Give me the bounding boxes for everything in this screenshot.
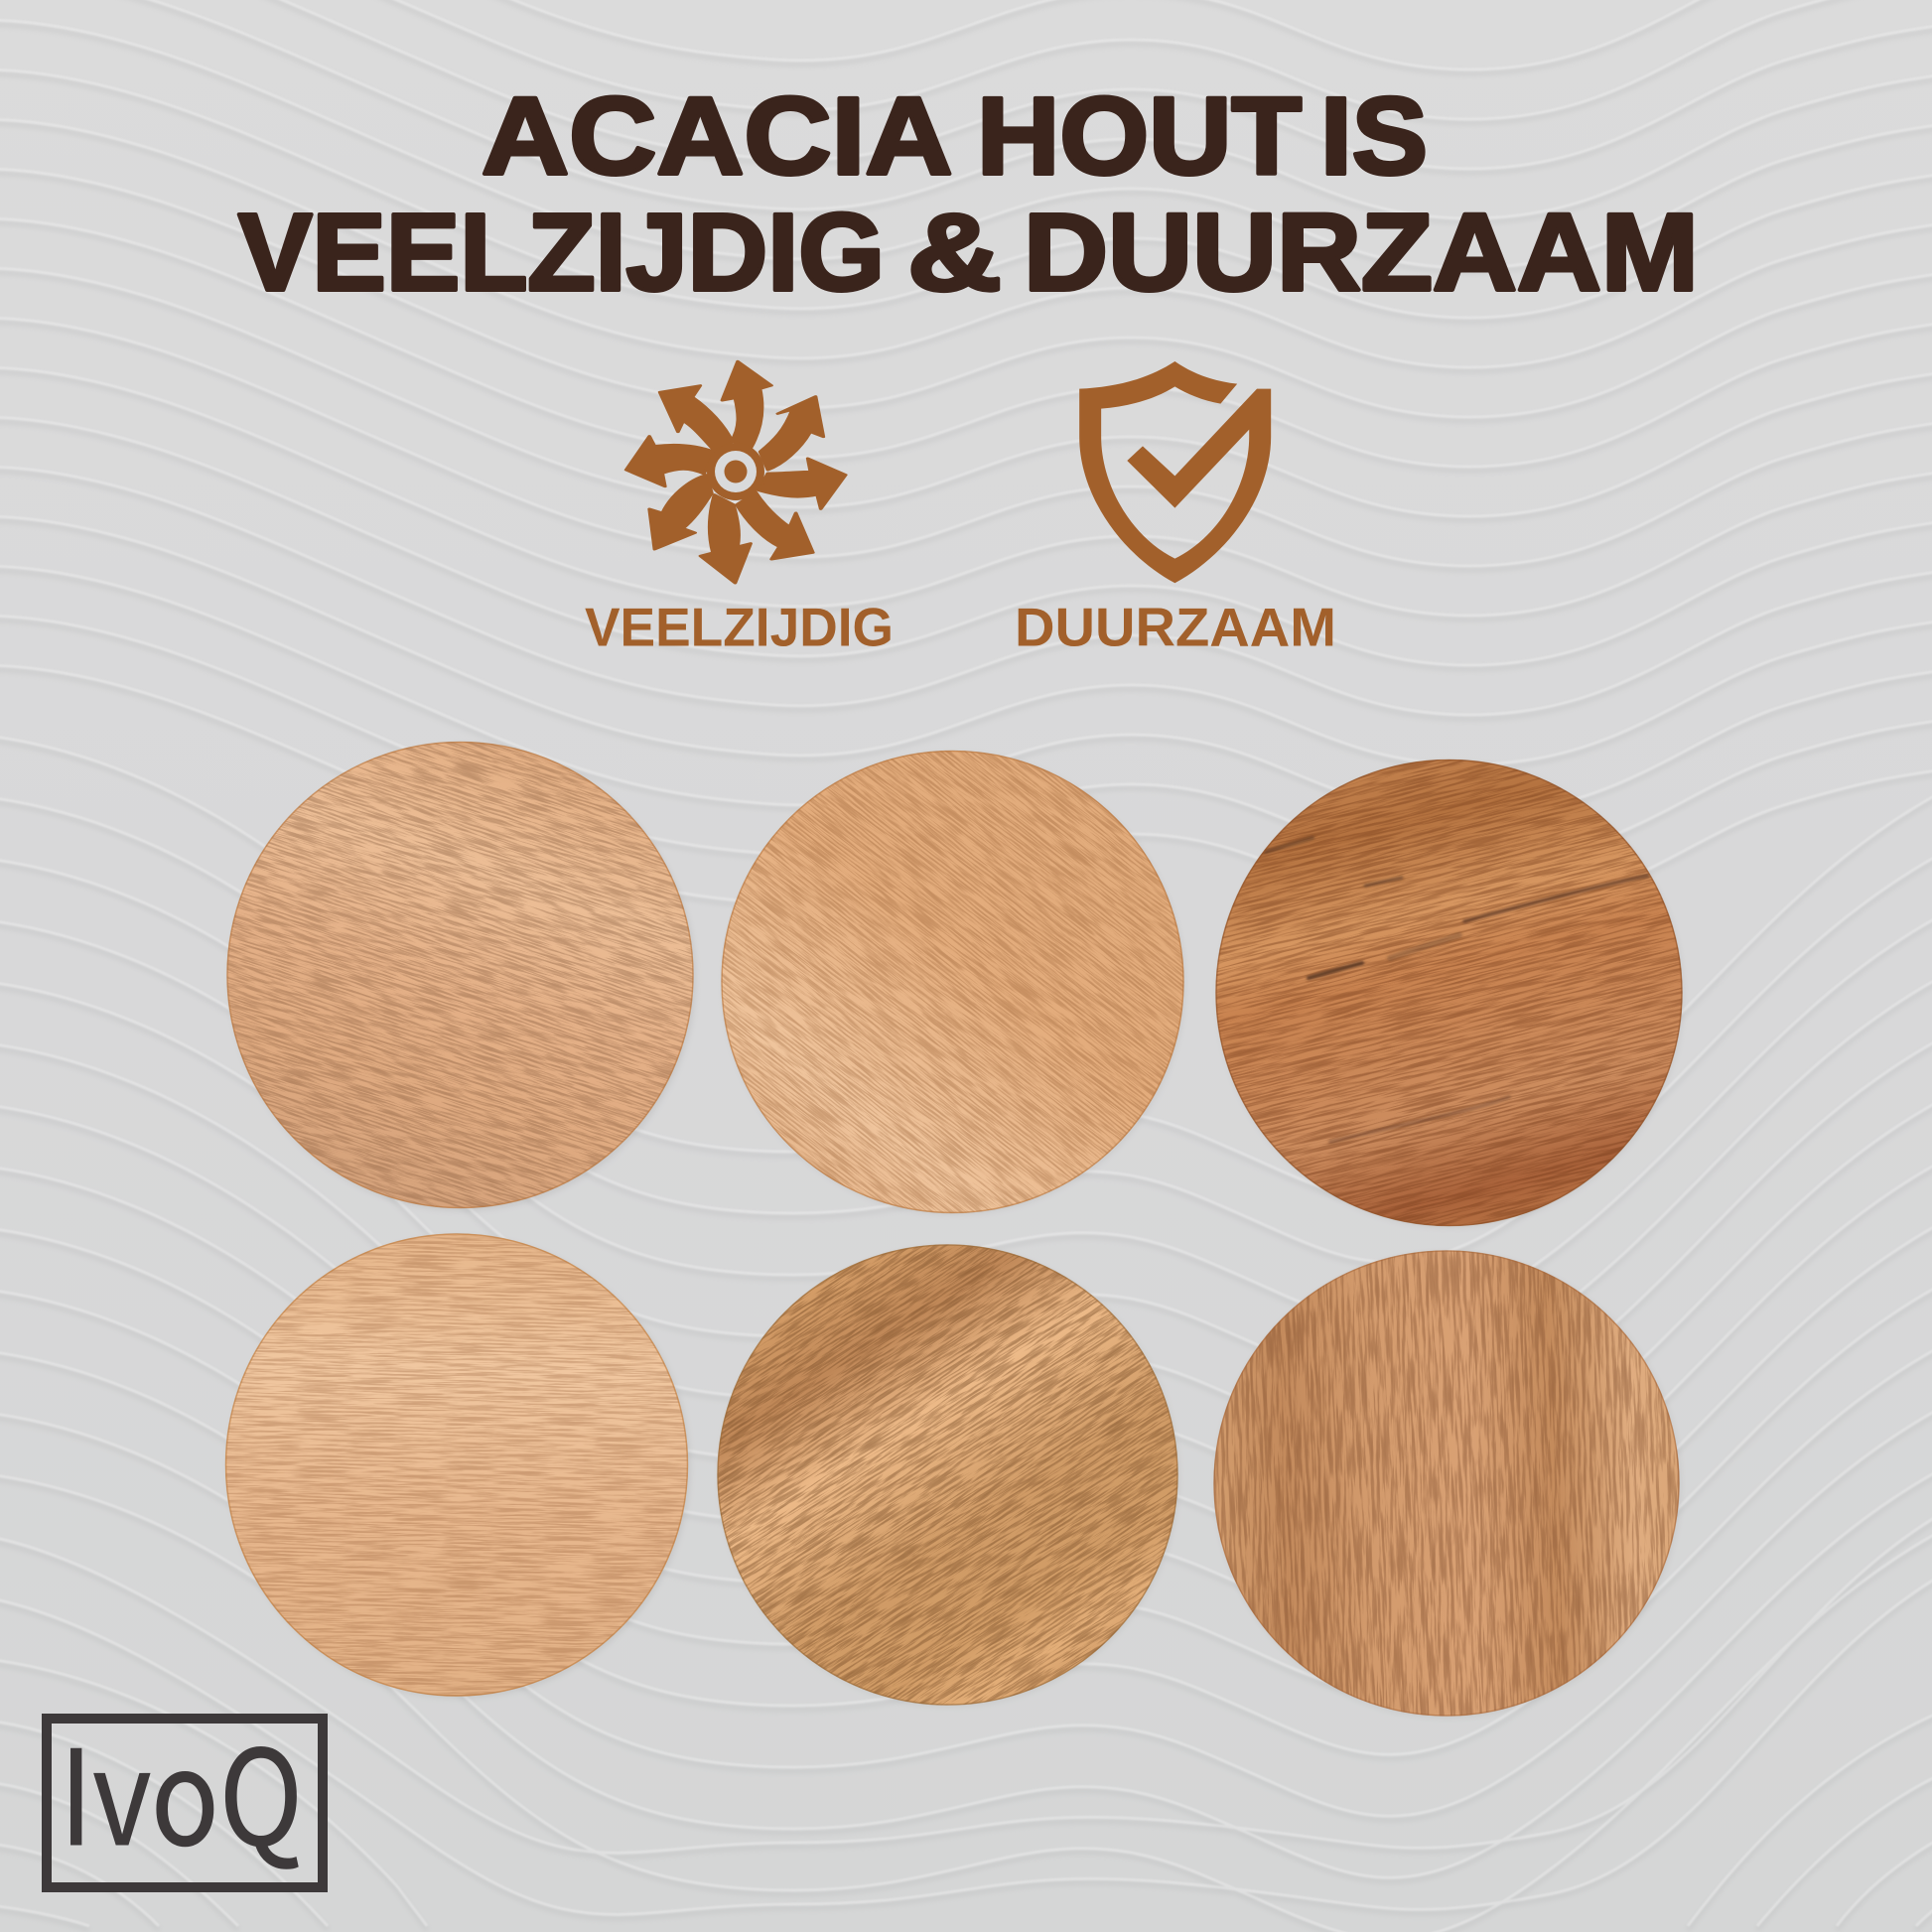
label: duurzaam: DUURZAAM	[1015, 596, 1336, 657]
coaster 1	[226, 741, 695, 1211]
title line 2: VEELZIJDIG	[238, 192, 885, 314]
title line 2: DUURZAAM	[1024, 192, 1699, 314]
title line 2: &	[907, 192, 1002, 314]
logo frame	[47, 1719, 323, 1887]
coaster 2	[721, 751, 1184, 1213]
feature: veelzijdig	[585, 361, 894, 657]
feature: duurzaam	[1015, 361, 1336, 657]
label: veelzijdig: VEELZIJDIG	[585, 596, 894, 657]
coaster 4	[224, 1233, 690, 1698]
title line 1: IS	[1320, 75, 1428, 198]
title	[238, 75, 1699, 314]
logo: IvoQ	[47, 1694, 323, 1887]
wooden coasters	[125, 741, 1683, 1869]
coaster 5	[717, 1244, 1178, 1706]
icon: shield with check	[1079, 361, 1271, 583]
coaster 6	[1213, 1250, 1680, 1718]
coaster 3	[1215, 759, 1683, 1717]
title line 1: HOUT	[977, 75, 1302, 198]
title line 1: ACACIA	[482, 75, 950, 198]
logo wordmark: IvoQ	[60, 1694, 303, 1883]
icon: radiating arrows	[626, 361, 846, 583]
